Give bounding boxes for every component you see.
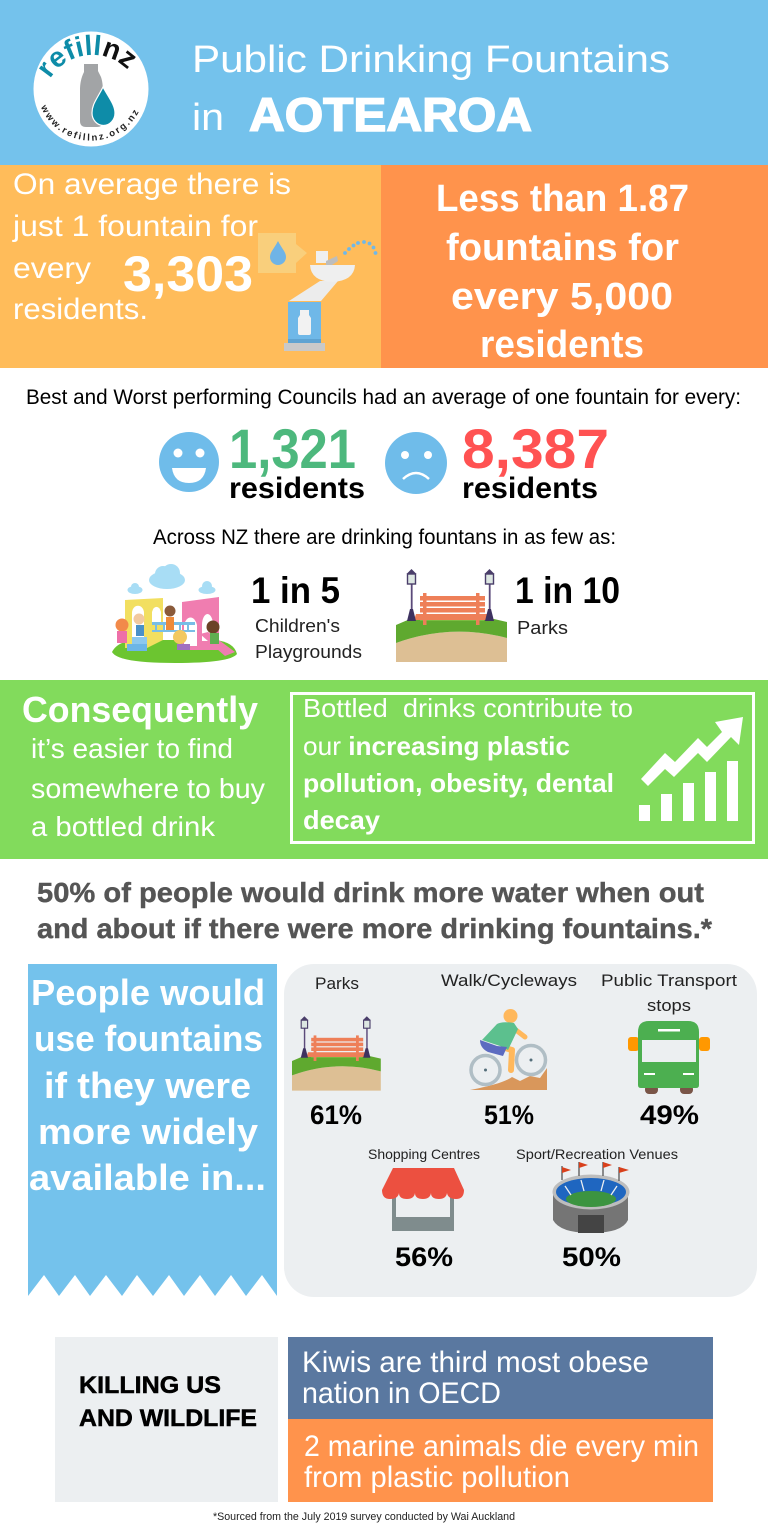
panel: people would use fountains: People would <box>31 972 265 1013</box>
callout: bottled drinks <box>292 693 754 842</box>
panel: average per fountain: every <box>13 252 91 285</box>
panel: killing us and wildlife: KILLING US <box>79 1372 221 1399</box>
callout: bottled drinks: Bottled drinks contribute to <box>303 693 633 723</box>
panel: people would use fountains: more widely <box>38 1111 258 1152</box>
stat: best council: 1,321 <box>229 417 356 480</box>
stat: parks: 1 in 10 <box>515 570 620 611</box>
panel: locations <box>284 964 757 1297</box>
panel: obesity fact <box>288 1337 713 1420</box>
panel: obesity fact: nation in OECD <box>302 1377 501 1410</box>
footnote: *Sourced from the July 2019 survey conducted by Wai Auckland <box>213 1511 515 1523</box>
icon: playground <box>112 564 237 663</box>
location: parks: 61% <box>310 1100 362 1130</box>
panel: marine animals fact <box>288 1419 713 1502</box>
panel: obesity fact: Kiwis are third most obese <box>302 1346 649 1379</box>
stat: parks <box>515 570 620 638</box>
panel: average per fountain: 3,303 <box>123 246 253 302</box>
location: shopping centres: 56% <box>395 1242 453 1272</box>
location: shopping centres: Shopping Centres <box>368 1146 480 1162</box>
panel: fountains per 5000: fountains for <box>446 227 679 269</box>
stat: worst council: residents <box>462 472 598 505</box>
stat: playgrounds <box>251 570 362 662</box>
across NZ heading: Across NZ there are drinking fountans in as few as: <box>153 526 616 549</box>
panel: consequently: Consequently <box>22 689 258 730</box>
panel: average per fountain: residents. <box>13 293 148 326</box>
location: sport and recreation venues: Sport/Recreation Venues <box>516 1146 678 1162</box>
logo: refillnz: refillnz <box>39 34 136 78</box>
panel: marine animals fact: from plastic pollution <box>304 1461 570 1494</box>
callout: bottled drinks: pollution, obesity, dental <box>303 768 614 798</box>
location: walk and cycleways: 51% <box>484 1100 534 1130</box>
panel: fountains per 5000 <box>381 165 768 368</box>
panel: fountains per 5000: every 5,000 <box>451 276 673 318</box>
location: public transport: Public Transport <box>601 971 737 990</box>
statement: 50% of people <box>37 877 712 944</box>
logo: refillnz <box>34 32 148 146</box>
councils heading: Best and Worst performing Councils had an average of one fountain for every: <box>26 386 741 409</box>
location: sport and recreation venues <box>516 1146 678 1272</box>
stat: playgrounds: Playgrounds <box>255 642 362 662</box>
panel: average per fountain: On average there is <box>13 168 291 201</box>
stat: playgrounds: Children's <box>255 616 340 636</box>
stat: playgrounds: 1 in 5 <box>251 570 340 611</box>
icon: drinking fountain <box>258 233 377 351</box>
location: sport and recreation venues: 50% <box>562 1242 621 1272</box>
panel: killing us and wildlife: AND WILDLIFE <box>79 1405 257 1432</box>
location: public transport: stops <box>647 996 691 1015</box>
callout: bottled drinks: our increasing plastic <box>303 731 570 761</box>
stat: parks: Parks <box>517 618 568 638</box>
title: AOTEAROA <box>249 88 532 141</box>
title: in <box>192 97 224 139</box>
title <box>192 39 670 141</box>
statement: 50% of people: and about if there were more drinking fountains.* <box>37 913 712 944</box>
panel: people would use fountains: if they were <box>44 1065 251 1106</box>
panel: people would use fountains: available in... <box>29 1157 266 1198</box>
location: public transport: 49% <box>640 1100 699 1130</box>
panel: people would use fountains: use fountains <box>34 1018 263 1059</box>
stat: worst council: 8,387 <box>462 417 609 480</box>
panel: consequently: a bottled drink <box>31 811 216 842</box>
stat: best council: residents <box>229 472 365 505</box>
icon: rising chart <box>639 717 743 821</box>
panel: fountains per 5000: residents <box>480 324 644 366</box>
icon: park bench <box>396 569 507 662</box>
panel: average per fountain: just 1 fountain for <box>12 210 258 243</box>
panel: marine animals fact: 2 marine animals die every min <box>304 1430 699 1463</box>
icon: sad face <box>385 432 447 494</box>
location: walk and cycleways <box>441 971 577 1130</box>
icon: happy face <box>159 432 219 492</box>
stat: worst council <box>462 417 609 505</box>
logo: refillnz: www.refillnz.org.nz <box>41 104 139 141</box>
location: shopping centres <box>368 1146 480 1272</box>
panel: fountains per 5000: Less than 1.87 <box>436 178 689 220</box>
panel: consequently <box>0 680 768 859</box>
callout: bottled drinks: decay <box>303 805 381 835</box>
location: walk and cycleways: Walk/Cycleways <box>441 971 577 990</box>
panel: consequently: it’s easier to find <box>31 733 233 764</box>
panel: killing us and wildlife <box>55 1337 278 1502</box>
statement: 50% of people: 50% of people would drink more water when out <box>37 877 704 908</box>
panel: average per fountain <box>0 165 381 368</box>
location: parks: Parks <box>315 974 359 993</box>
panel: consequently: somewhere to buy <box>31 773 265 804</box>
location: public transport <box>601 971 737 1130</box>
title: Public Drinking Fountains <box>192 39 670 81</box>
header band <box>0 0 768 165</box>
panel: people would use fountains <box>28 964 277 1296</box>
location: parks <box>292 974 381 1130</box>
